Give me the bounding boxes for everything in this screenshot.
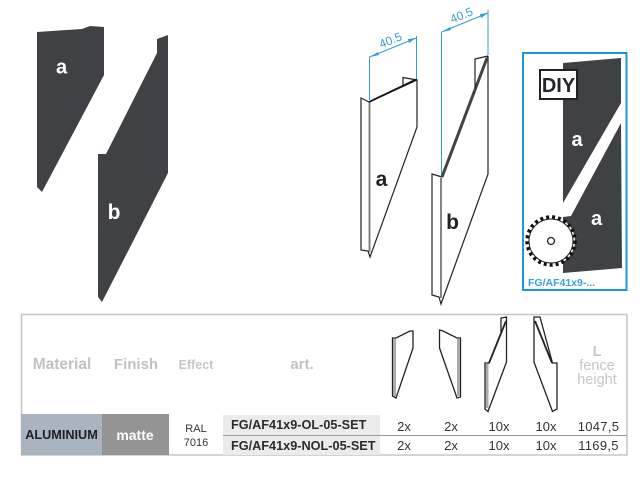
- cell: RAL 7016: 7016: [184, 437, 208, 449]
- dark panel b: b: [108, 201, 120, 224]
- DIY badge: DIY: [542, 75, 576, 97]
- row 2: 10x: [489, 438, 510, 453]
- label a: a: [376, 168, 388, 191]
- cell: matte: matte: [116, 427, 154, 443]
- cut piece lower a: a: [591, 208, 603, 230]
- row 1: 2x: [397, 419, 411, 434]
- header: L fence height: fence: [579, 358, 615, 374]
- row 1: [223, 415, 619, 435]
- dimension 40.5 for profile b: [442, 4, 488, 175]
- row 2: 10x: [536, 438, 557, 453]
- table frame: [22, 314, 627, 455]
- article caption: FG/AF41x9-...: [528, 277, 595, 289]
- article 1: FG/AF41x9-OL-05-SET: [231, 418, 367, 432]
- cut piece upper a: a: [571, 129, 583, 151]
- outline of profile a: [361, 78, 417, 257]
- dark panel b: [98, 35, 168, 302]
- row divider: [223, 434, 627, 436]
- row 2: [223, 436, 619, 455]
- icon: profile b small right: [534, 317, 557, 412]
- line drawing: profile a with dimension: [361, 29, 417, 257]
- label b: b: [446, 211, 459, 234]
- row 1: 10x: [489, 419, 510, 434]
- panel border: [523, 53, 626, 290]
- article 2: [223, 436, 380, 455]
- icon: profile b small left: [485, 317, 506, 412]
- header: art.: art.: [290, 356, 314, 373]
- cell: RAL 7016: [184, 423, 208, 449]
- dimension 40.5 for profile a: 40.5: [377, 29, 404, 51]
- row 1: 2x: [444, 419, 458, 434]
- cell: RAL 7016: RAL: [185, 423, 207, 435]
- header: Material: Material: [33, 356, 91, 373]
- header: Effect: Effect: [179, 358, 214, 372]
- article 1: [223, 415, 380, 435]
- dark panel a: a: [56, 56, 68, 78]
- icon: profile a small right: [440, 330, 460, 398]
- header: Finish: Finish: [114, 356, 158, 373]
- DIY panel: [523, 53, 626, 290]
- row 2: 2x: [444, 438, 458, 453]
- header: L fence height: L: [593, 344, 602, 360]
- dimension 40.5 for profile b: 40.5: [448, 4, 475, 26]
- cell: ALUMINIUM: [21, 414, 102, 455]
- header: L fence height: [577, 344, 617, 388]
- row 2: 2x: [397, 438, 411, 453]
- line drawing: profile b with dimension: [432, 4, 488, 304]
- header: L fence height: height: [577, 372, 617, 388]
- cell: ALUMINIUM: ALUMINIUM: [25, 428, 98, 442]
- cell: matte: [102, 414, 169, 455]
- table: [21, 314, 627, 455]
- icon: saw blade: [527, 217, 575, 265]
- cut piece lower a: [563, 123, 622, 273]
- article 2: FG/AF41x9-NOL-05-SET: [231, 439, 376, 453]
- row 2: 1169,5: [578, 438, 619, 453]
- row 1: 1047,5: [578, 419, 619, 434]
- row 1: 10x: [536, 419, 557, 434]
- DIY badge: [540, 70, 577, 99]
- outline of profile b: [432, 56, 488, 304]
- cut piece upper a: [563, 58, 621, 203]
- icon: profile a small left: [392, 331, 413, 398]
- dark panel a: [37, 26, 104, 192]
- dimension 40.5 for profile a: [370, 29, 416, 100]
